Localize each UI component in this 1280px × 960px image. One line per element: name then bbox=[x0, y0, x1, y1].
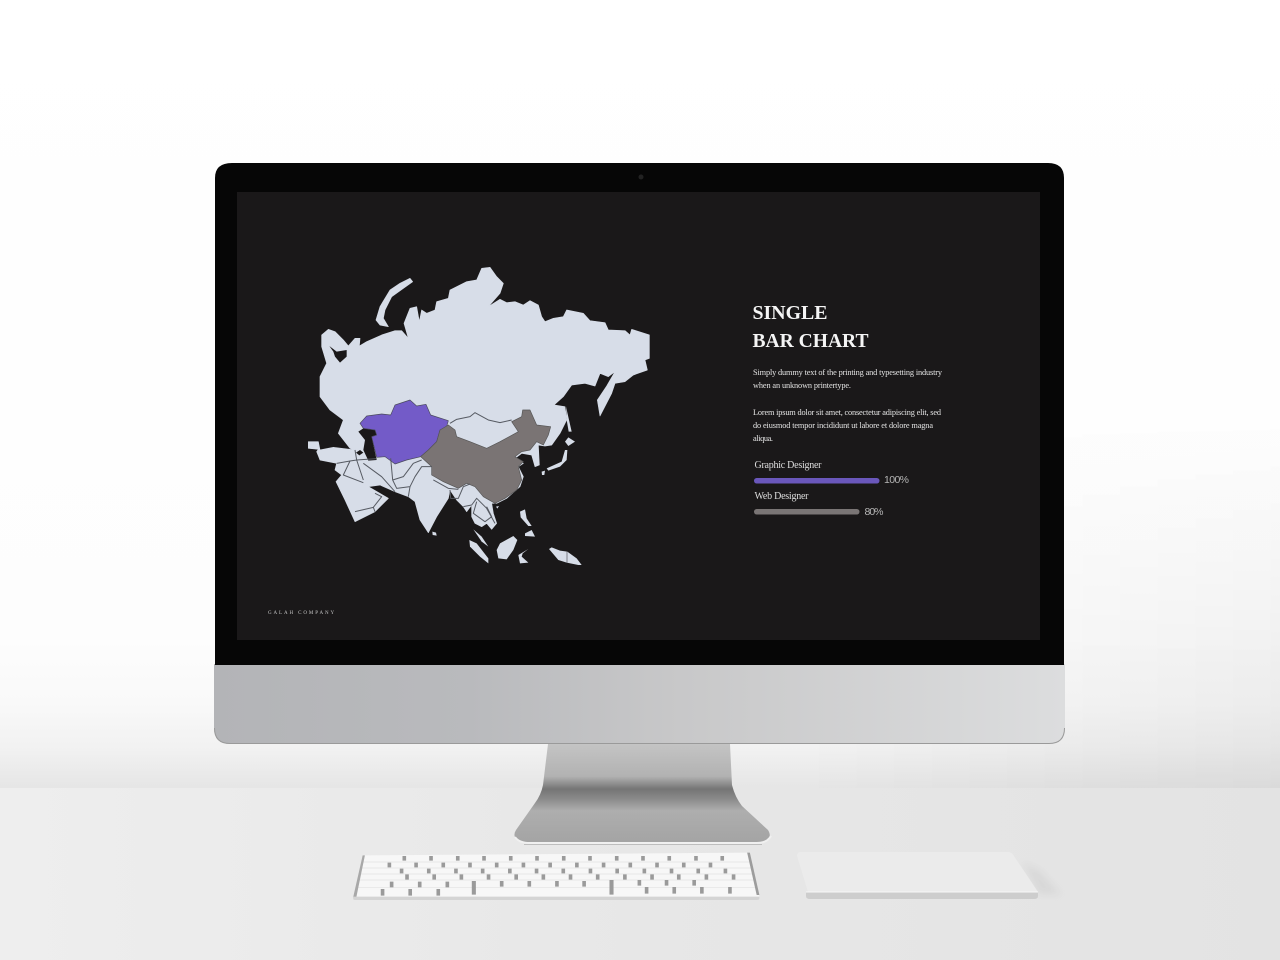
body text: when an unknown printertype. bbox=[753, 381, 851, 390]
footer company name: GALAH COMPANY bbox=[268, 611, 336, 616]
Kazakhstan highlighted bbox=[360, 400, 448, 464]
bar: Graphic Designer 100%: Graphic Designer bbox=[754, 460, 822, 471]
chin edge highlight bbox=[214, 728, 1064, 744]
body text: Simply dummy text of the printing and typesetting industry bbox=[753, 368, 943, 377]
screen bbox=[237, 192, 1040, 640]
White Sea bbox=[329, 346, 347, 363]
bar: Graphic Designer 100% bbox=[754, 460, 909, 486]
Novaya Zemlya bbox=[376, 278, 413, 327]
bar: Web Designer 80% bbox=[754, 491, 884, 518]
title bbox=[752, 302, 869, 352]
body text: aliqua. bbox=[753, 434, 773, 443]
Black Sea strait bbox=[356, 450, 363, 455]
bar: Web Designer 80%: 80% bbox=[864, 506, 884, 518]
background: wall and desk bbox=[0, 540, 1280, 960]
China highlighted bbox=[421, 410, 551, 503]
webcam bbox=[638, 174, 644, 180]
map of Asia bbox=[308, 267, 649, 565]
title: SINGLE bbox=[752, 302, 828, 324]
bar: Graphic Designer 100%: 100% bbox=[884, 474, 909, 486]
islands bbox=[432, 407, 582, 565]
keyboard bbox=[353, 853, 759, 900]
monitor stand bbox=[514, 744, 771, 844]
Caspian Sea bbox=[358, 428, 377, 461]
trackpad bbox=[797, 852, 1062, 899]
country borders bbox=[337, 413, 512, 523]
body text: Lorem ipsum dolor sit amet, consectetur adipiscing elit, sed bbox=[753, 408, 942, 417]
title: BAR CHART bbox=[752, 330, 869, 352]
bar: Web Designer 80%: Web Designer bbox=[754, 491, 809, 502]
body text: do eiusmod tempor incididunt ut labore et dolore magna bbox=[753, 421, 933, 430]
body text bbox=[753, 368, 943, 443]
monitor bezel bbox=[215, 163, 1064, 665]
mainland bbox=[308, 267, 649, 533]
monitor bbox=[214, 163, 1065, 844]
monitor chin bbox=[214, 664, 1065, 744]
